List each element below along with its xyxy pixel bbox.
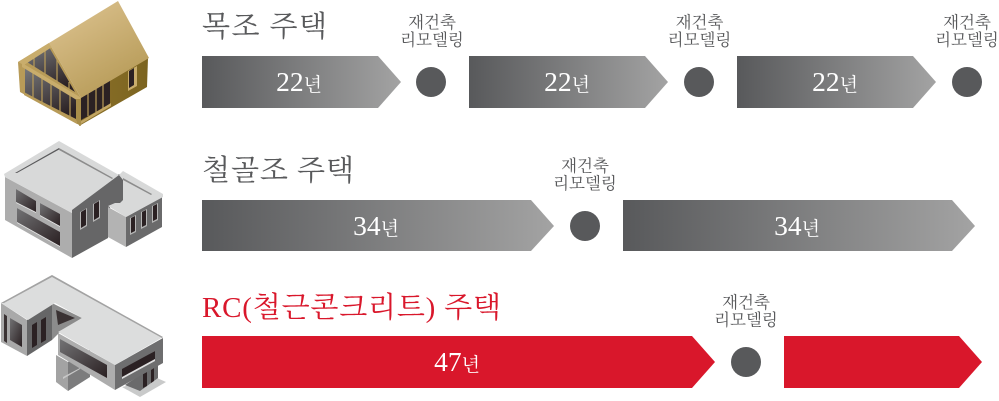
- arrow: third 22 years: [737, 56, 936, 108]
- remodel label 2: 재건축: [676, 13, 723, 32]
- icon: wooden house: [18, 1, 149, 126]
- arrow: 47 years: 47년: [434, 346, 480, 377]
- remodel label: 리모델링: [714, 310, 778, 330]
- arrow: first 22 years: 22년: [276, 66, 322, 97]
- remodel marker: [570, 211, 600, 241]
- arrow: third 22 years: 22년: [812, 66, 858, 97]
- row: reinforced concrete house lifespan: [202, 291, 982, 388]
- remodel marker 2: [684, 67, 714, 97]
- arrow: first 22 years: [202, 56, 401, 108]
- icon: steel frame house: [4, 141, 163, 258]
- arrow: second 22 years: 22년: [544, 66, 590, 97]
- remodel marker 3: [952, 67, 982, 97]
- remodel label 1: 리모델링: [400, 30, 464, 50]
- icon: reinforced concrete house: [1, 275, 166, 397]
- row: wooden house lifespan: [202, 10, 999, 108]
- arrow: second 34 years: [623, 200, 975, 251]
- row: steel frame house lifespan: [202, 154, 975, 251]
- remodel label: 리모델링: [553, 173, 617, 193]
- remodel marker 1: [416, 67, 446, 97]
- arrow: second 22 years: [469, 56, 668, 108]
- arrow: continuing lifespan: [784, 336, 982, 388]
- heading: RC house: RC(철근콘크리트) 주택: [202, 291, 501, 324]
- remodel label: 재건축: [722, 293, 770, 312]
- remodel label 1: 재건축: [408, 13, 456, 32]
- arrow: first 34 years: 34년: [353, 210, 399, 241]
- arrow: 47 years: [202, 336, 715, 388]
- remodel label 3: 리모델링: [935, 30, 999, 50]
- arrow: first 34 years: [202, 200, 554, 251]
- remodel label 3: 재건축: [943, 13, 991, 32]
- remodel label 2: 리모델링: [668, 30, 731, 50]
- remodel label: 재건축: [561, 156, 609, 176]
- arrow: second 34 years: 34년: [774, 210, 820, 241]
- heading: steel frame house: 철골조 주택: [202, 154, 354, 187]
- heading: wooden house: 목조 주택: [202, 10, 327, 43]
- remodel marker: [731, 347, 761, 377]
